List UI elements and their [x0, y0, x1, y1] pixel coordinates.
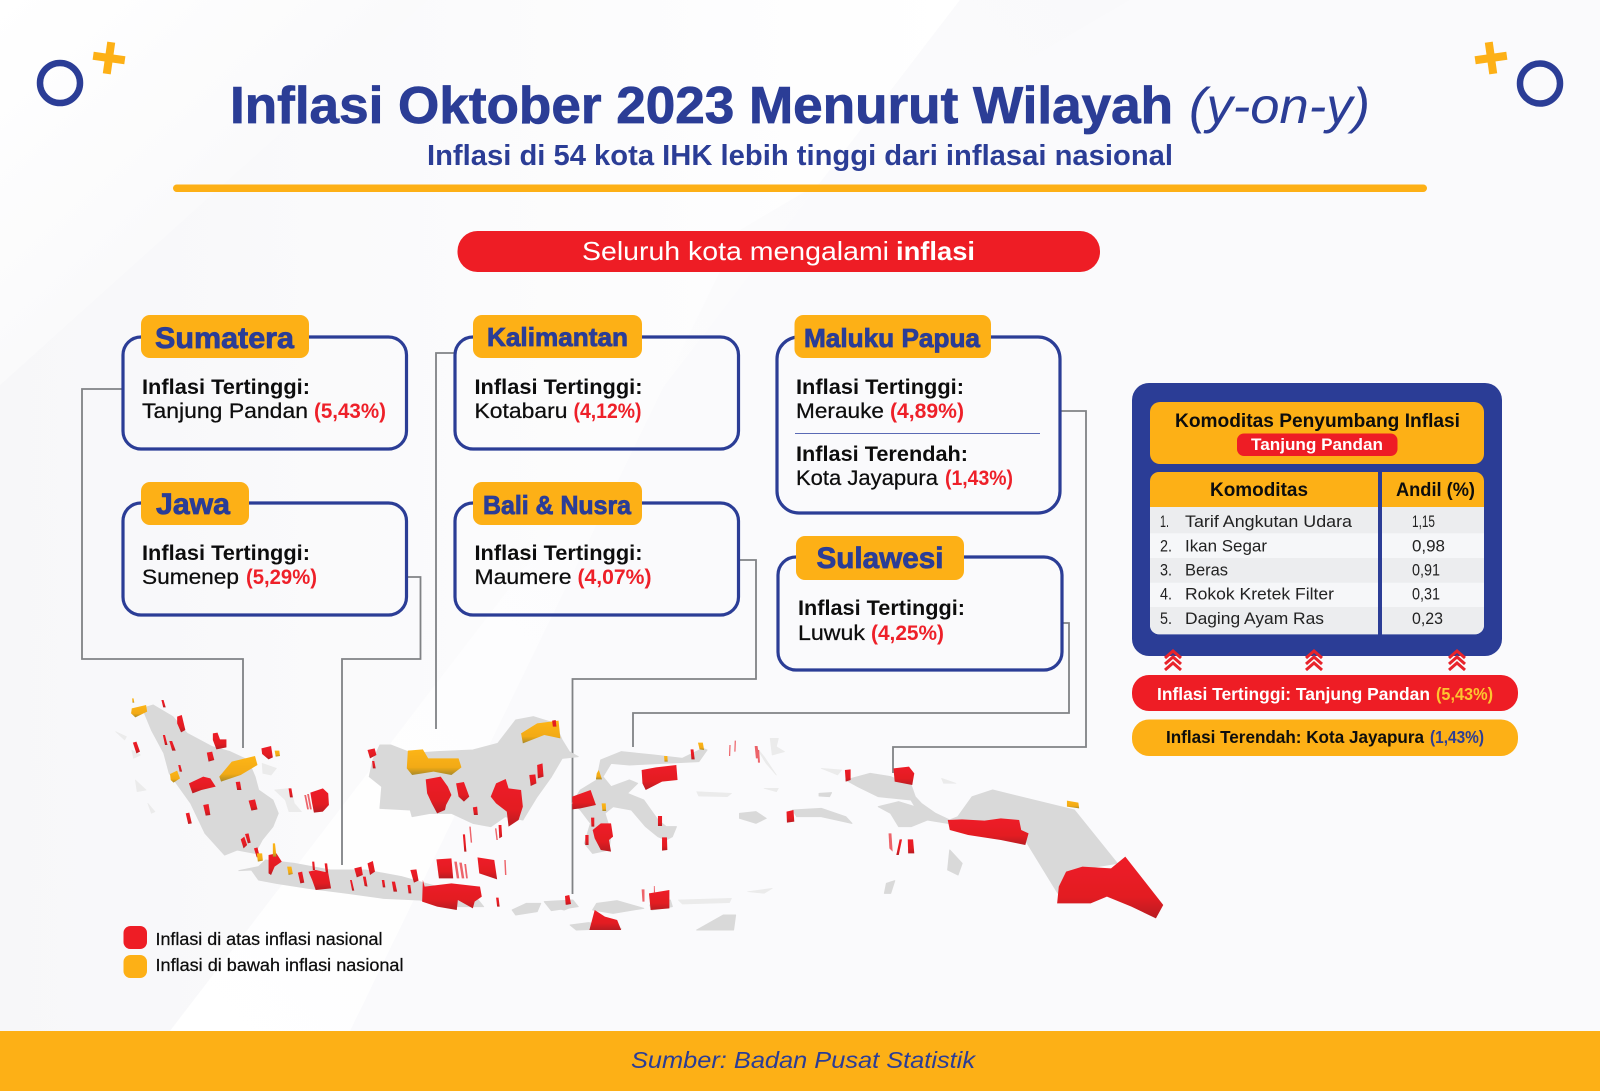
panel: Sulawesi	[778, 536, 1062, 670]
panel: Maluku Papua: Maluku Papua	[804, 323, 981, 353]
title: Inflasi Oktober 2023 Menurut Wilayah	[230, 77, 1173, 135]
table title: Komoditas Penyumbang Inflasi	[1175, 411, 1460, 432]
panel: Jawa: Jawa	[156, 488, 230, 521]
map: Indonesia east	[552, 738, 1163, 930]
table values	[1160, 513, 1445, 628]
table values: 0,31	[1412, 586, 1440, 604]
regions above national	[133, 700, 571, 910]
callout: highest inflation	[1132, 675, 1518, 711]
land: small west islands	[116, 732, 301, 813]
table values: 2.	[1160, 538, 1172, 556]
banner: all cities inflation: inflasi	[896, 236, 975, 266]
table header: Komoditas	[1210, 480, 1308, 501]
thin red strips	[304, 794, 506, 878]
legend	[124, 926, 404, 978]
land: Nusa Tenggara	[552, 900, 736, 930]
table values: 1.	[1160, 513, 1169, 531]
table values: 0,98	[1412, 538, 1445, 556]
panel: Kalimantan: (4,12%)	[574, 399, 642, 423]
title underline	[173, 184, 1427, 192]
table values: Ikan Segar	[1185, 538, 1268, 556]
table values: Rokok Kretek Filter	[1185, 586, 1335, 604]
land: Papua	[846, 773, 1117, 893]
callout: lowest inflation: Inflasi Terendah: Kota Jayapura	[1166, 727, 1424, 747]
table values: 4.	[1160, 586, 1172, 604]
subtitle: Inflasi di 54 kota IHK lebih tinggi dari inflasai nasional	[427, 140, 1173, 172]
panel: Sulawesi: (4,25%)	[871, 621, 944, 645]
regions below national	[596, 743, 1079, 811]
banner: all cities inflation: Seluruh kota mengalami	[582, 236, 889, 266]
callout: lowest inflation: (1,43%)	[1430, 727, 1484, 747]
table values: 3.	[1160, 562, 1172, 580]
panel: Maluku Papua: Inflasi Terendah:	[796, 442, 968, 466]
icon: right circle and plus	[1473, 40, 1560, 104]
panel: Bali & Nusra: Inflasi Tertinggi:	[474, 541, 642, 565]
panel: Kalimantan: Kalimantan	[487, 322, 628, 352]
panel: Kalimantan	[455, 315, 738, 449]
connector lines	[82, 353, 1086, 894]
panel: Jawa: (5,29%)	[246, 565, 317, 589]
icon: chevron arrows	[1165, 651, 1465, 670]
panel: Sumatera: Sumatera	[155, 322, 294, 355]
tiny red on yellow	[552, 720, 556, 727]
table header: Andil (%)	[1396, 480, 1475, 501]
panel: Maluku Papua: Kota Jayapura	[796, 466, 938, 490]
regions above national	[572, 749, 1163, 930]
panel: Sumatera: Tanjung Pandan	[142, 399, 308, 423]
table title	[1150, 402, 1484, 464]
footer	[0, 1031, 1600, 1091]
table values: Beras	[1185, 562, 1228, 580]
table values: 0,23	[1412, 610, 1443, 628]
table header	[1150, 472, 1484, 507]
panel: Maluku Papua	[777, 315, 1060, 513]
panel: Bali & Nusra	[455, 482, 738, 615]
panel: Maluku Papua: Inflasi Tertinggi:	[796, 375, 964, 399]
table values: 1,15	[1412, 513, 1435, 531]
legend: above national: Inflasi di atas inflasi nasional	[156, 929, 382, 949]
panel: Bali & Nusra: Maumere	[474, 565, 572, 589]
panel: Kalimantan: Inflasi Tertinggi:	[474, 375, 642, 399]
panel: Jawa: Sumenep	[142, 565, 239, 589]
land: Aru and Dolak	[884, 850, 962, 893]
map: Indonesia west	[116, 698, 578, 915]
panel: Bali & Nusra: (4,07%)	[578, 565, 652, 589]
table values: Daging Ayam Ras	[1185, 610, 1324, 628]
panel: Maluku Papua: (1,43%)	[945, 466, 1013, 490]
panel: Jawa	[123, 482, 406, 615]
land: Sulawesi	[572, 748, 707, 853]
banner: all cities inflation	[458, 231, 1100, 272]
table values: 0,91	[1412, 562, 1440, 580]
table values: Tarif Angkutan Udara	[1185, 513, 1353, 531]
panel: Sumatera: Inflasi Tertinggi:	[142, 375, 310, 399]
panel: Kalimantan: Kotabaru	[474, 399, 568, 423]
thin red strips	[642, 741, 893, 902]
callout: lowest inflation	[1132, 720, 1518, 756]
table values: 5.	[1160, 610, 1172, 628]
land: Sumatra	[142, 705, 278, 855]
panel: Jawa: Inflasi Tertinggi:	[142, 541, 310, 565]
table title: Tanjung Pandan	[1251, 436, 1383, 454]
callout: highest inflation: Inflasi Tertinggi: Tanjung Pandan	[1157, 684, 1430, 704]
regions below national	[131, 698, 560, 875]
legend: below national: Inflasi di bawah inflasi nasional	[156, 955, 404, 975]
panel: Bali & Nusra: Bali & Nusra	[483, 490, 632, 520]
panel: commodity table	[1132, 383, 1502, 656]
footer: Sumber: Badan Pusat Statistik	[631, 1047, 977, 1073]
land: Kalimantan	[369, 717, 578, 827]
land: Maluku	[678, 738, 956, 904]
land: Java	[239, 860, 484, 907]
callout: highest inflation: (5,43%)	[1436, 684, 1493, 704]
panel: Maluku Papua: (4,89%)	[890, 399, 964, 423]
panel: Maluku Papua: Merauke	[796, 399, 884, 423]
panel: Sumatera	[123, 315, 406, 449]
panel: Sulawesi: Luwuk	[798, 621, 865, 645]
panel: Sulawesi: Inflasi Tertinggi:	[798, 596, 965, 620]
table rows	[1150, 507, 1484, 634]
land: Lesser Sunda west	[512, 900, 578, 915]
panel: Sumatera: (5,43%)	[314, 399, 386, 423]
panel: Sulawesi: Sulawesi	[816, 542, 944, 575]
title: (y-on-y)	[1189, 78, 1370, 134]
icon: left circle and plus	[40, 40, 127, 103]
